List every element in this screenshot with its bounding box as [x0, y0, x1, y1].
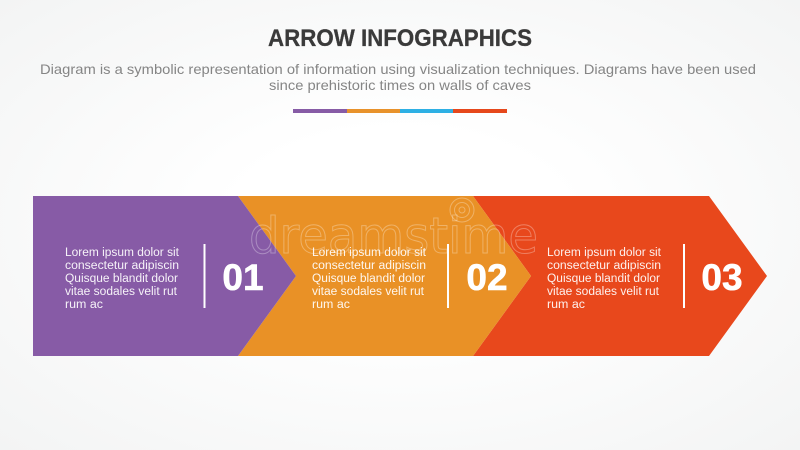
title divider: four colour line	[293, 109, 507, 113]
step 1 description: consectetur adipiscin	[65, 260, 179, 272]
step 3 description: Quisque blandit dolor	[547, 273, 660, 285]
step 2 description: vitae sodales velit rut	[312, 286, 425, 298]
step 1 number: 01	[222, 257, 264, 298]
step 1 description: rum ac	[65, 299, 103, 311]
step 1 description: Quisque blandit dolor	[65, 273, 178, 285]
step 3 description: rum ac	[547, 299, 585, 311]
step 3 description: vitae sodales velit rut	[547, 286, 660, 298]
step 2 description	[312, 247, 427, 311]
step 2 description: Lorem ipsum dolor sit	[312, 247, 427, 259]
watermark: dreamstime	[249, 207, 538, 265]
arrow step 1: purple	[33, 196, 296, 356]
arrow step 3: red	[473, 196, 767, 356]
arrow step 2: orange	[238, 196, 531, 356]
subtitle text	[40, 61, 756, 93]
step 2 description: rum ac	[312, 299, 350, 311]
step 3 description: Lorem ipsum dolor sit	[547, 247, 662, 259]
step 3 description	[547, 247, 662, 311]
step 2 separator	[447, 244, 449, 308]
step 3 description: consectetur adipiscin	[547, 260, 661, 272]
step 2 number: 02	[466, 257, 508, 298]
step 1 separator	[204, 244, 206, 308]
subtitle text: since prehistoric times on walls of caves	[269, 77, 531, 93]
title: ARROW INFOGRAPHICS	[268, 25, 532, 52]
step 1 description: vitae sodales velit rut	[65, 286, 178, 298]
subtitle text: Diagram is a symbolic representation of information using visualization techniques. Diagrams have been used	[40, 61, 756, 77]
step 2 description: consectetur adipiscin	[312, 260, 426, 272]
step 2 description: Quisque blandit dolor	[312, 273, 425, 285]
arrow diagram	[33, 196, 767, 356]
step 1 description	[65, 247, 180, 311]
step 3 separator	[683, 244, 685, 308]
step 3 number: 03	[701, 257, 743, 298]
step 1 description: Lorem ipsum dolor sit	[65, 247, 180, 259]
